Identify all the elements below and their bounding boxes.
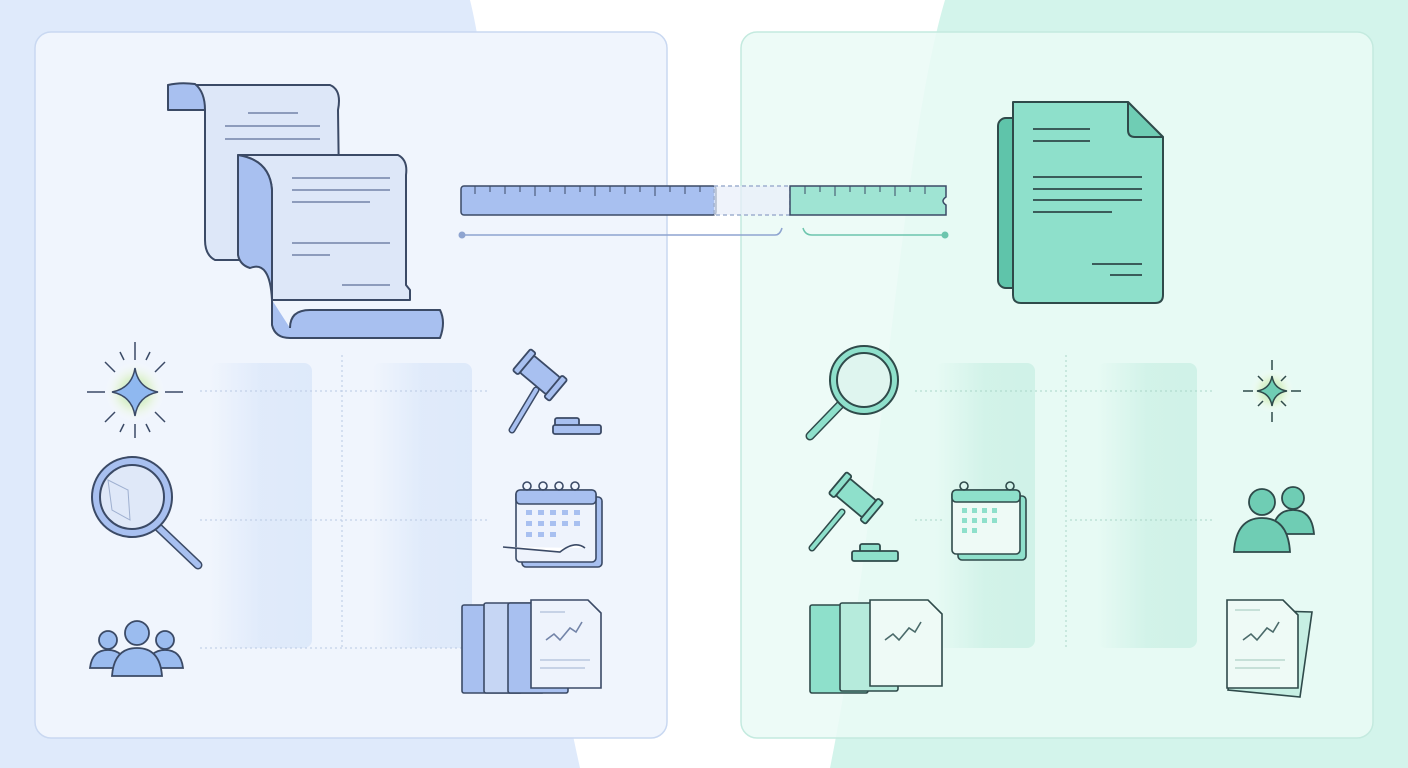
icon: calendar right	[952, 482, 1026, 560]
icon: sparkle left	[87, 342, 183, 438]
icon: ruler	[458, 186, 948, 238]
icon: document stack left	[462, 600, 601, 693]
panel: left	[35, 32, 667, 738]
panel: right	[741, 32, 1373, 738]
icon: people left	[90, 621, 183, 676]
icon: document right	[1227, 600, 1312, 697]
icon: green document	[998, 102, 1163, 303]
icon: magnifier right	[810, 346, 898, 436]
icon: gavel right	[812, 472, 898, 561]
icon: magnifier left	[92, 457, 198, 565]
icon: document stack right	[810, 600, 942, 693]
icon: calendar left	[503, 482, 602, 567]
icon: scrolls	[168, 83, 443, 338]
icon: gavel left	[512, 349, 601, 434]
icon: people right	[1234, 487, 1314, 552]
icon: sparkle right	[1243, 360, 1301, 422]
